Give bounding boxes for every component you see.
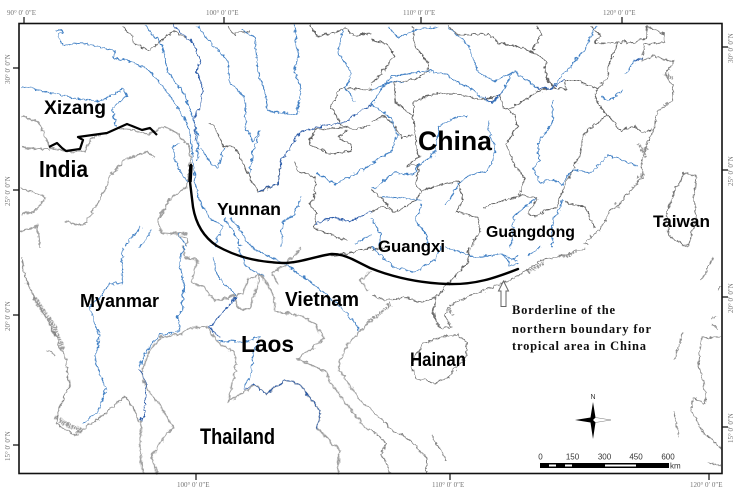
bottom longitude labels xyxy=(177,481,723,489)
scale bar: 0 xyxy=(538,452,543,462)
top longitude labels: 90° 0′ 0″E xyxy=(7,9,36,17)
bottom longitude labels: 120° 0′ 0″E xyxy=(690,481,723,489)
left latitude labels: 15° 0′ 0″N xyxy=(4,431,12,461)
label: Thailand: Thailand xyxy=(200,424,275,449)
northern boundary line: main xyxy=(190,165,518,284)
scale bar: 450 xyxy=(629,452,643,462)
top longitude labels: 120° 0′ 0″E xyxy=(603,9,636,17)
scale bar xyxy=(538,452,681,470)
left latitude labels xyxy=(4,54,12,461)
right latitude labels xyxy=(727,33,735,443)
right latitude labels: 30° 0′ 0″N xyxy=(727,33,735,63)
Hainan outline xyxy=(410,333,466,382)
South China coast xyxy=(370,248,583,328)
top longitude labels: 100° 0′ 0″E xyxy=(206,9,239,17)
label: Taiwan: Taiwan xyxy=(653,212,710,231)
Taiwan outline xyxy=(665,172,695,246)
top longitude labels xyxy=(7,9,636,17)
north arrow xyxy=(575,394,611,439)
label: Laos: Laos xyxy=(241,331,294,357)
right latitude labels: 15° 0′ 0″N xyxy=(727,413,735,443)
scale bar: 300 xyxy=(598,452,612,462)
scale bar: 150 xyxy=(566,452,580,462)
label: Myanmar: Myanmar xyxy=(80,290,159,311)
bottom longitude labels: 100° 0′ 0″E xyxy=(177,481,210,489)
islands and mainland south-east coast xyxy=(370,256,720,473)
scale bar: km xyxy=(670,462,681,470)
annotation text: tropical area in China xyxy=(512,339,647,353)
left latitude labels: 25° 0′ 0″N xyxy=(4,176,12,206)
label: Yunnan: Yunnan xyxy=(217,199,281,219)
province boundaries xyxy=(122,25,650,328)
annotation text: northern boundary for xyxy=(512,322,651,336)
label: Guangdong: Guangdong xyxy=(486,224,575,241)
left latitude labels: 30° 0′ 0″N xyxy=(4,54,12,84)
label: Guangxi: Guangxi xyxy=(378,238,445,256)
Place labels xyxy=(39,98,710,449)
left latitude labels: 20° 0′ 0″N xyxy=(4,301,12,331)
country boundaries xyxy=(20,115,370,473)
northern boundary line: Xizang section xyxy=(49,124,157,151)
annotation text xyxy=(512,303,651,353)
label: India: India xyxy=(39,156,88,182)
right latitude labels: 25° 0′ 0″N xyxy=(727,156,735,186)
arrow pointing to borderline xyxy=(498,281,508,306)
label: Vietnam: Vietnam xyxy=(285,289,359,311)
northern boundary line: thick start xyxy=(190,165,191,182)
label: Xizang: Xizang xyxy=(44,98,106,119)
north arrow: N xyxy=(590,394,596,401)
bottom longitude labels: 110° 0′ 0″E xyxy=(432,481,464,489)
label: Hainan: Hainan xyxy=(410,350,466,371)
label: China: China xyxy=(418,126,493,156)
scale bar: 600 xyxy=(661,452,675,462)
top longitude labels: 110° 0′ 0″E xyxy=(403,9,435,17)
right latitude labels: 20° 0′ 0″N xyxy=(727,283,735,313)
annotation text: Borderline of the xyxy=(512,303,615,317)
rivers xyxy=(20,25,641,428)
